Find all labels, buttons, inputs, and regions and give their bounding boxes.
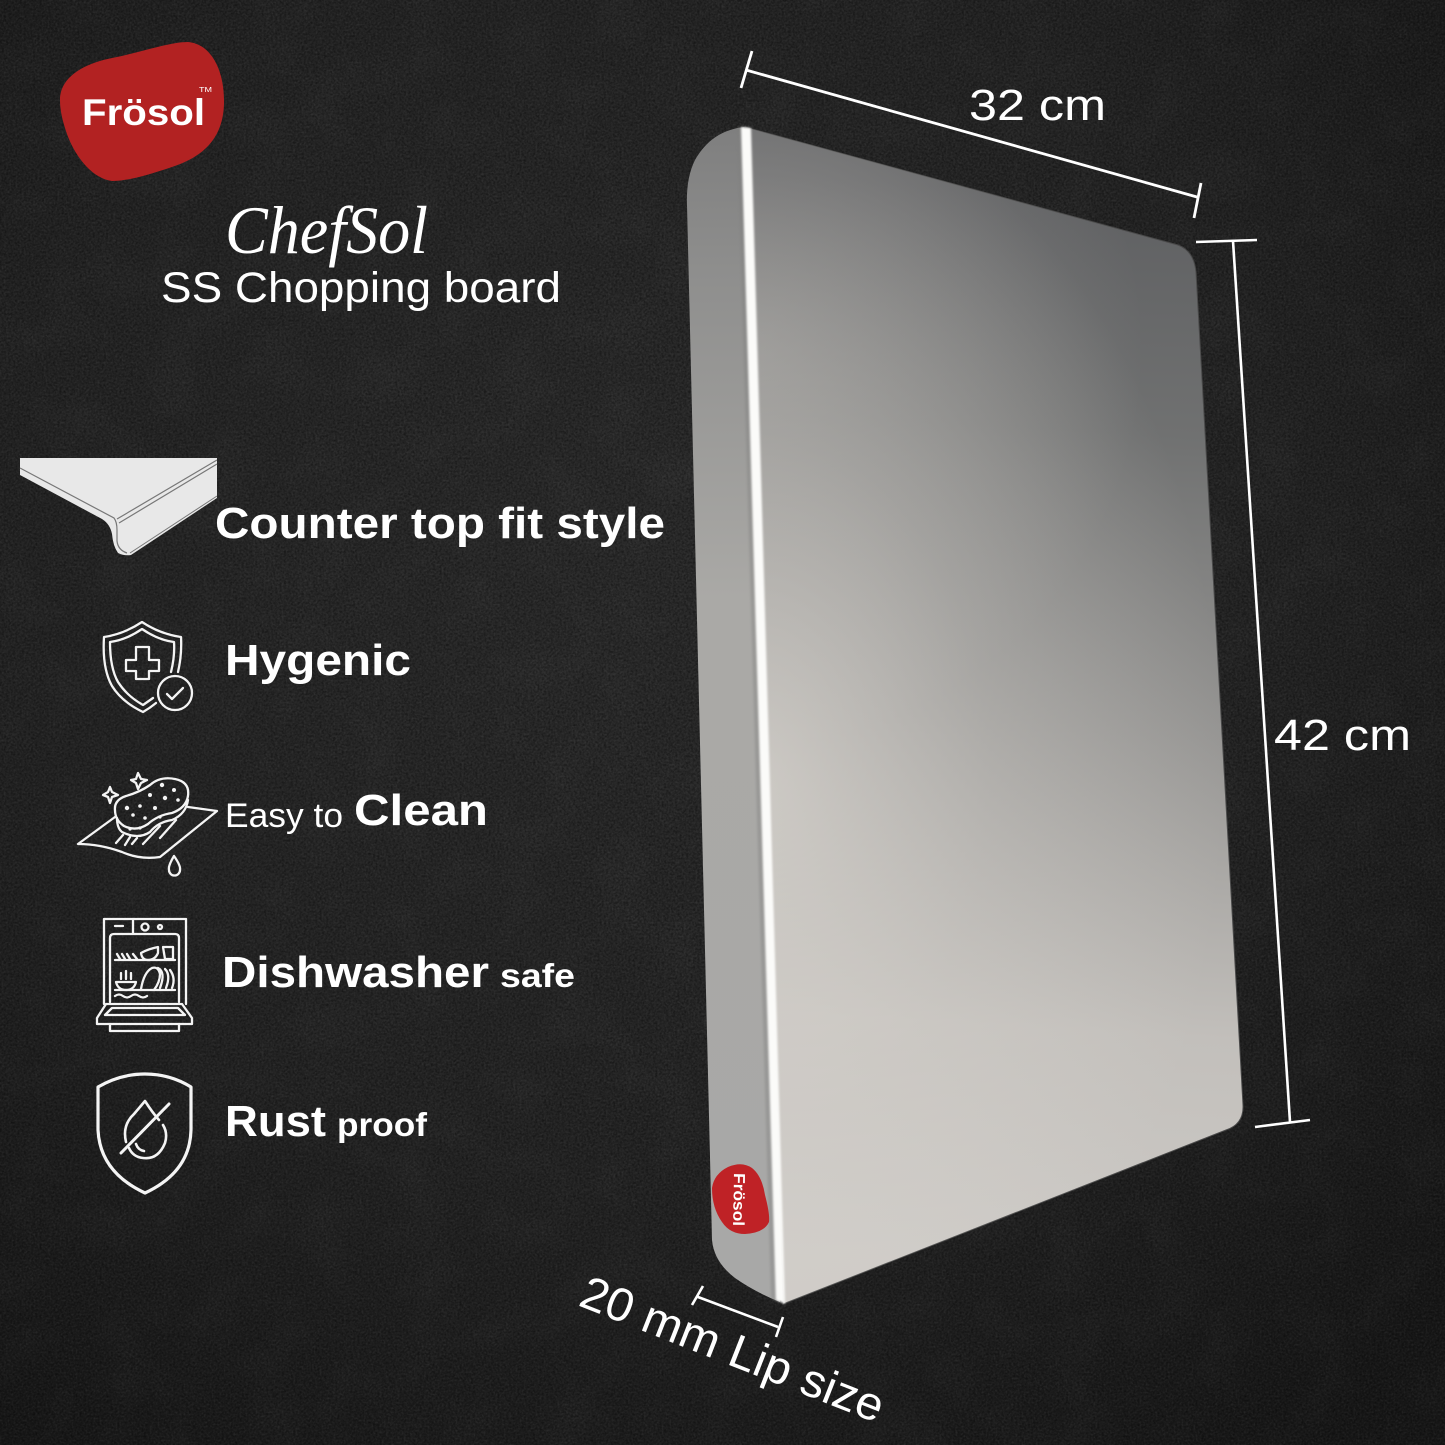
feature: Rust proof [225,1097,428,1146]
feature: Easy to Clean: Easy to [225,797,343,835]
steel chopping board [686,126,1244,1306]
icon: counter top lip board [20,458,217,555]
icon: shield with crossed water drop [98,1074,191,1193]
dimension: 42 cm height [1196,240,1411,1127]
board logo: Frösol sticker [712,1164,769,1234]
feature: Rust proof: proof [337,1106,428,1143]
feature: Hygenic: Hygenic [225,636,411,685]
feature: Dishwasher safe: safe [500,957,575,994]
logo: Frösol red blob [60,42,224,181]
feature: Easy to Clean [225,786,488,835]
dimension: 32 cm width [741,51,1201,218]
board: side lip [687,127,780,1302]
dimension: 32 cm width: 32 cm [969,81,1106,130]
logo: Frösol red blob: Frösol [82,92,205,133]
feature: Counter top fit style: Counter top fit style [215,499,665,548]
dimension: 42 cm height: 42 cm [1274,711,1411,760]
feature: Rust proof: Rust [225,1097,326,1146]
icon: sponge on cloth [78,773,217,875]
feature: Easy to Clean: Clean [354,786,488,835]
icon: shield with plus and check [104,622,192,712]
dimension: 20 mm lip size: 20 mm Lip size [573,1265,892,1432]
board: bright bend ridge [737,127,785,1304]
logo: Frösol red blob: TM [199,87,212,94]
title: SS Chopping board: SS Chopping board [161,264,561,312]
board: top face [744,126,1244,1305]
icon: dishwasher [97,919,192,1031]
board logo: Frösol sticker: Frösol [729,1173,747,1226]
title: ChefSol script: ChefSol [225,192,428,268]
feature: Dishwasher safe: Dishwasher [222,948,489,997]
feature: Dishwasher safe [222,948,575,997]
